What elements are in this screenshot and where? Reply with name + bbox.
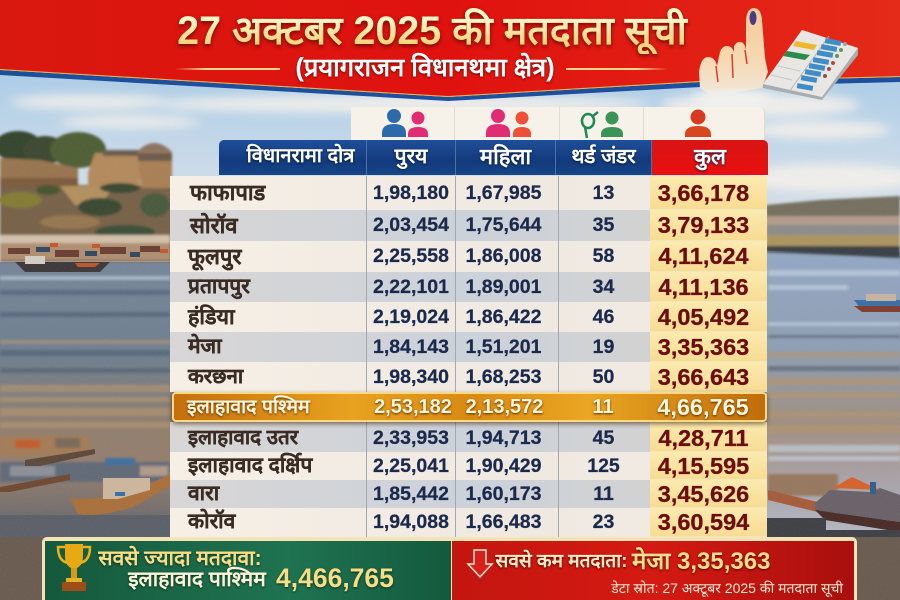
row: Bara: 1,85,442 — [373, 483, 449, 505]
row: Karachhana: 1,68,253 — [466, 366, 541, 388]
header: third gender — [556, 140, 652, 175]
highest value: 4,466,765 — [276, 563, 394, 593]
row: Allahabad North — [170, 422, 767, 452]
header: third gender: थर्ड जंडर — [571, 145, 636, 168]
row: Phulpur: 58 — [593, 245, 614, 267]
data source: डेटा स्रोत: 27 अक्टूबर 2025 की मतदाता सूची — [611, 580, 843, 596]
row: Phulpur: फूलपुर — [188, 244, 241, 269]
row: Karachhana: 50 — [593, 366, 614, 388]
right boats — [766, 474, 900, 538]
row: Phaphamau: 1,67,985 — [466, 182, 541, 204]
row: Phaphamau — [170, 176, 767, 210]
row: Handia: 1,86,422 — [466, 306, 541, 328]
right bank — [766, 196, 900, 258]
icon cell: total — [644, 107, 765, 140]
row: Meja: 19 — [593, 336, 614, 358]
row: Karachhana — [170, 362, 767, 392]
subtitle rule left — [175, 68, 280, 70]
highlighted row: Allahabad West: 2,13,572 — [466, 396, 543, 418]
row: Pratappur: 1,89,001 — [466, 276, 541, 298]
row: Allahabad North: 45 — [593, 427, 614, 449]
header: constituency: विधानरामा दोत्र — [247, 145, 354, 167]
row: Allahabad South: 125 — [587, 455, 620, 477]
highlighted row: Allahabad West: इलाहावाद पश्मिम — [187, 396, 310, 418]
subtitle rule right — [566, 68, 668, 70]
highlighted row: Allahabad West: 4,66,765 — [657, 394, 749, 420]
row: Handia: हंडिया — [188, 305, 235, 329]
row: Allahabad South: 1,90,429 — [466, 455, 541, 477]
row: Bara: 11 — [593, 483, 614, 505]
row: Phulpur: 2,25,558 — [373, 245, 449, 267]
row: Allahabad South: इलाहावाद दर्क्षिप — [188, 454, 312, 477]
row: Meja: 1,84,143 — [373, 336, 449, 358]
header: female — [456, 140, 556, 175]
row: Pratappur: प्रतापपुर — [188, 275, 250, 298]
row: Pratappur: 34 — [593, 276, 614, 298]
row: Phulpur: 4,11,624 — [658, 243, 749, 269]
row: Pratappur: 2,22,101 — [373, 276, 449, 298]
highlighted row: Allahabad West: 11 — [592, 396, 614, 418]
row: Karachhana: करछना — [188, 365, 243, 388]
row: Bara: 3,45,626 — [658, 481, 749, 507]
row: Koraon: 3,60,594 — [658, 509, 749, 535]
icon cell: female — [455, 107, 560, 140]
row: Handia: 4,05,492 — [658, 304, 749, 330]
panel: lowest turnout — [452, 541, 854, 600]
icon: trophy — [56, 544, 92, 591]
row: Meja: 1,51,201 — [466, 336, 541, 358]
right mid boat — [854, 294, 900, 312]
row: Handia: 46 — [593, 306, 614, 328]
header banner — [0, 0, 900, 101]
row: Soraon: 1,75,644 — [466, 214, 541, 236]
row: Allahabad North: इलाहावाद उतर — [188, 426, 298, 449]
row: Soraon: 3,79,133 — [658, 212, 749, 238]
row: Phaphamau: 3,66,178 — [658, 180, 749, 206]
highest label: सवसे ज्यादा मतदावा: — [98, 547, 262, 570]
highlighted row: Allahabad West: 2,53,182 — [374, 396, 452, 418]
row: Koraon: 1,94,088 — [373, 511, 449, 533]
left bank with fort — [0, 131, 172, 272]
header: total: कुल — [694, 144, 726, 169]
header: male: पुरय — [395, 145, 427, 168]
row: Allahabad North: 2,33,953 — [373, 427, 449, 449]
row: Soraon: सोरॉव — [190, 213, 238, 238]
row: Koraon — [170, 508, 767, 537]
row: Soraon: 35 — [593, 214, 614, 236]
highlighted row: Allahabad West — [172, 392, 767, 422]
icon header strip — [351, 107, 765, 140]
row: Koraon: कोरॉव — [188, 510, 235, 533]
title: 27 अक्टबर 2025 की मतदाता सूची — [177, 9, 687, 53]
row: Handia: 2,19,024 — [373, 306, 449, 328]
row: Phulpur — [170, 241, 767, 272]
icon: electronic voting machine — [763, 30, 858, 100]
header: female: महिला — [480, 144, 531, 169]
row: Meja: 3,35,363 — [658, 334, 749, 360]
row: Koraon: 1,66,483 — [466, 511, 541, 533]
highest constituency: इलाहावाद पाश्मिम — [128, 568, 266, 591]
row: Bara: वारा — [188, 482, 219, 505]
bottom summary bar — [42, 537, 857, 600]
row: Karachhana: 1,98,340 — [373, 366, 449, 388]
row: Phaphamau: 1,98,180 — [373, 182, 449, 204]
icon cell: male — [351, 107, 455, 140]
row: Meja: मेजा — [188, 335, 222, 358]
header: constituency — [219, 140, 367, 175]
row: Allahabad North: 4,28,711 — [658, 425, 749, 451]
lowest value: मेजा 3,35,363 — [632, 548, 770, 575]
subtitle: (प्रयागराजन विधानथमा क्षेत्र) — [295, 54, 555, 82]
row: Phaphamau: फाफापाड — [190, 180, 265, 205]
row: Allahabad South: 2,25,041 — [373, 455, 449, 477]
row: Allahabad North: 1,94,713 — [466, 427, 541, 449]
icon: down arrow — [466, 549, 494, 578]
row: Koraon: 23 — [593, 511, 614, 533]
row: Pratappur — [170, 272, 767, 302]
left boats — [0, 436, 170, 537]
row: Bara — [170, 480, 767, 508]
header: male — [367, 140, 456, 175]
row: Allahabad South: 4,15,595 — [658, 453, 749, 479]
row: Soraon — [170, 210, 767, 241]
panel: highest turnout — [45, 541, 451, 600]
header: total — [652, 140, 768, 175]
icon: inked finger hand — [692, 8, 770, 101]
row: Soraon: 2,03,454 — [373, 214, 449, 236]
row: Meja — [170, 332, 767, 362]
row: Handia — [170, 302, 767, 332]
row: Bara: 1,60,173 — [466, 483, 541, 505]
row: Phaphamau: 13 — [593, 182, 614, 204]
row: Karachhana: 3,66,643 — [658, 364, 749, 390]
lowest label: सवसे कम मतदाता: — [495, 551, 628, 572]
row: Allahabad South — [170, 452, 767, 480]
icon cell: third gender — [560, 107, 644, 140]
table header — [219, 140, 768, 175]
row: Phulpur: 1,86,008 — [466, 245, 541, 267]
row: Pratappur: 4,11,136 — [658, 274, 749, 300]
